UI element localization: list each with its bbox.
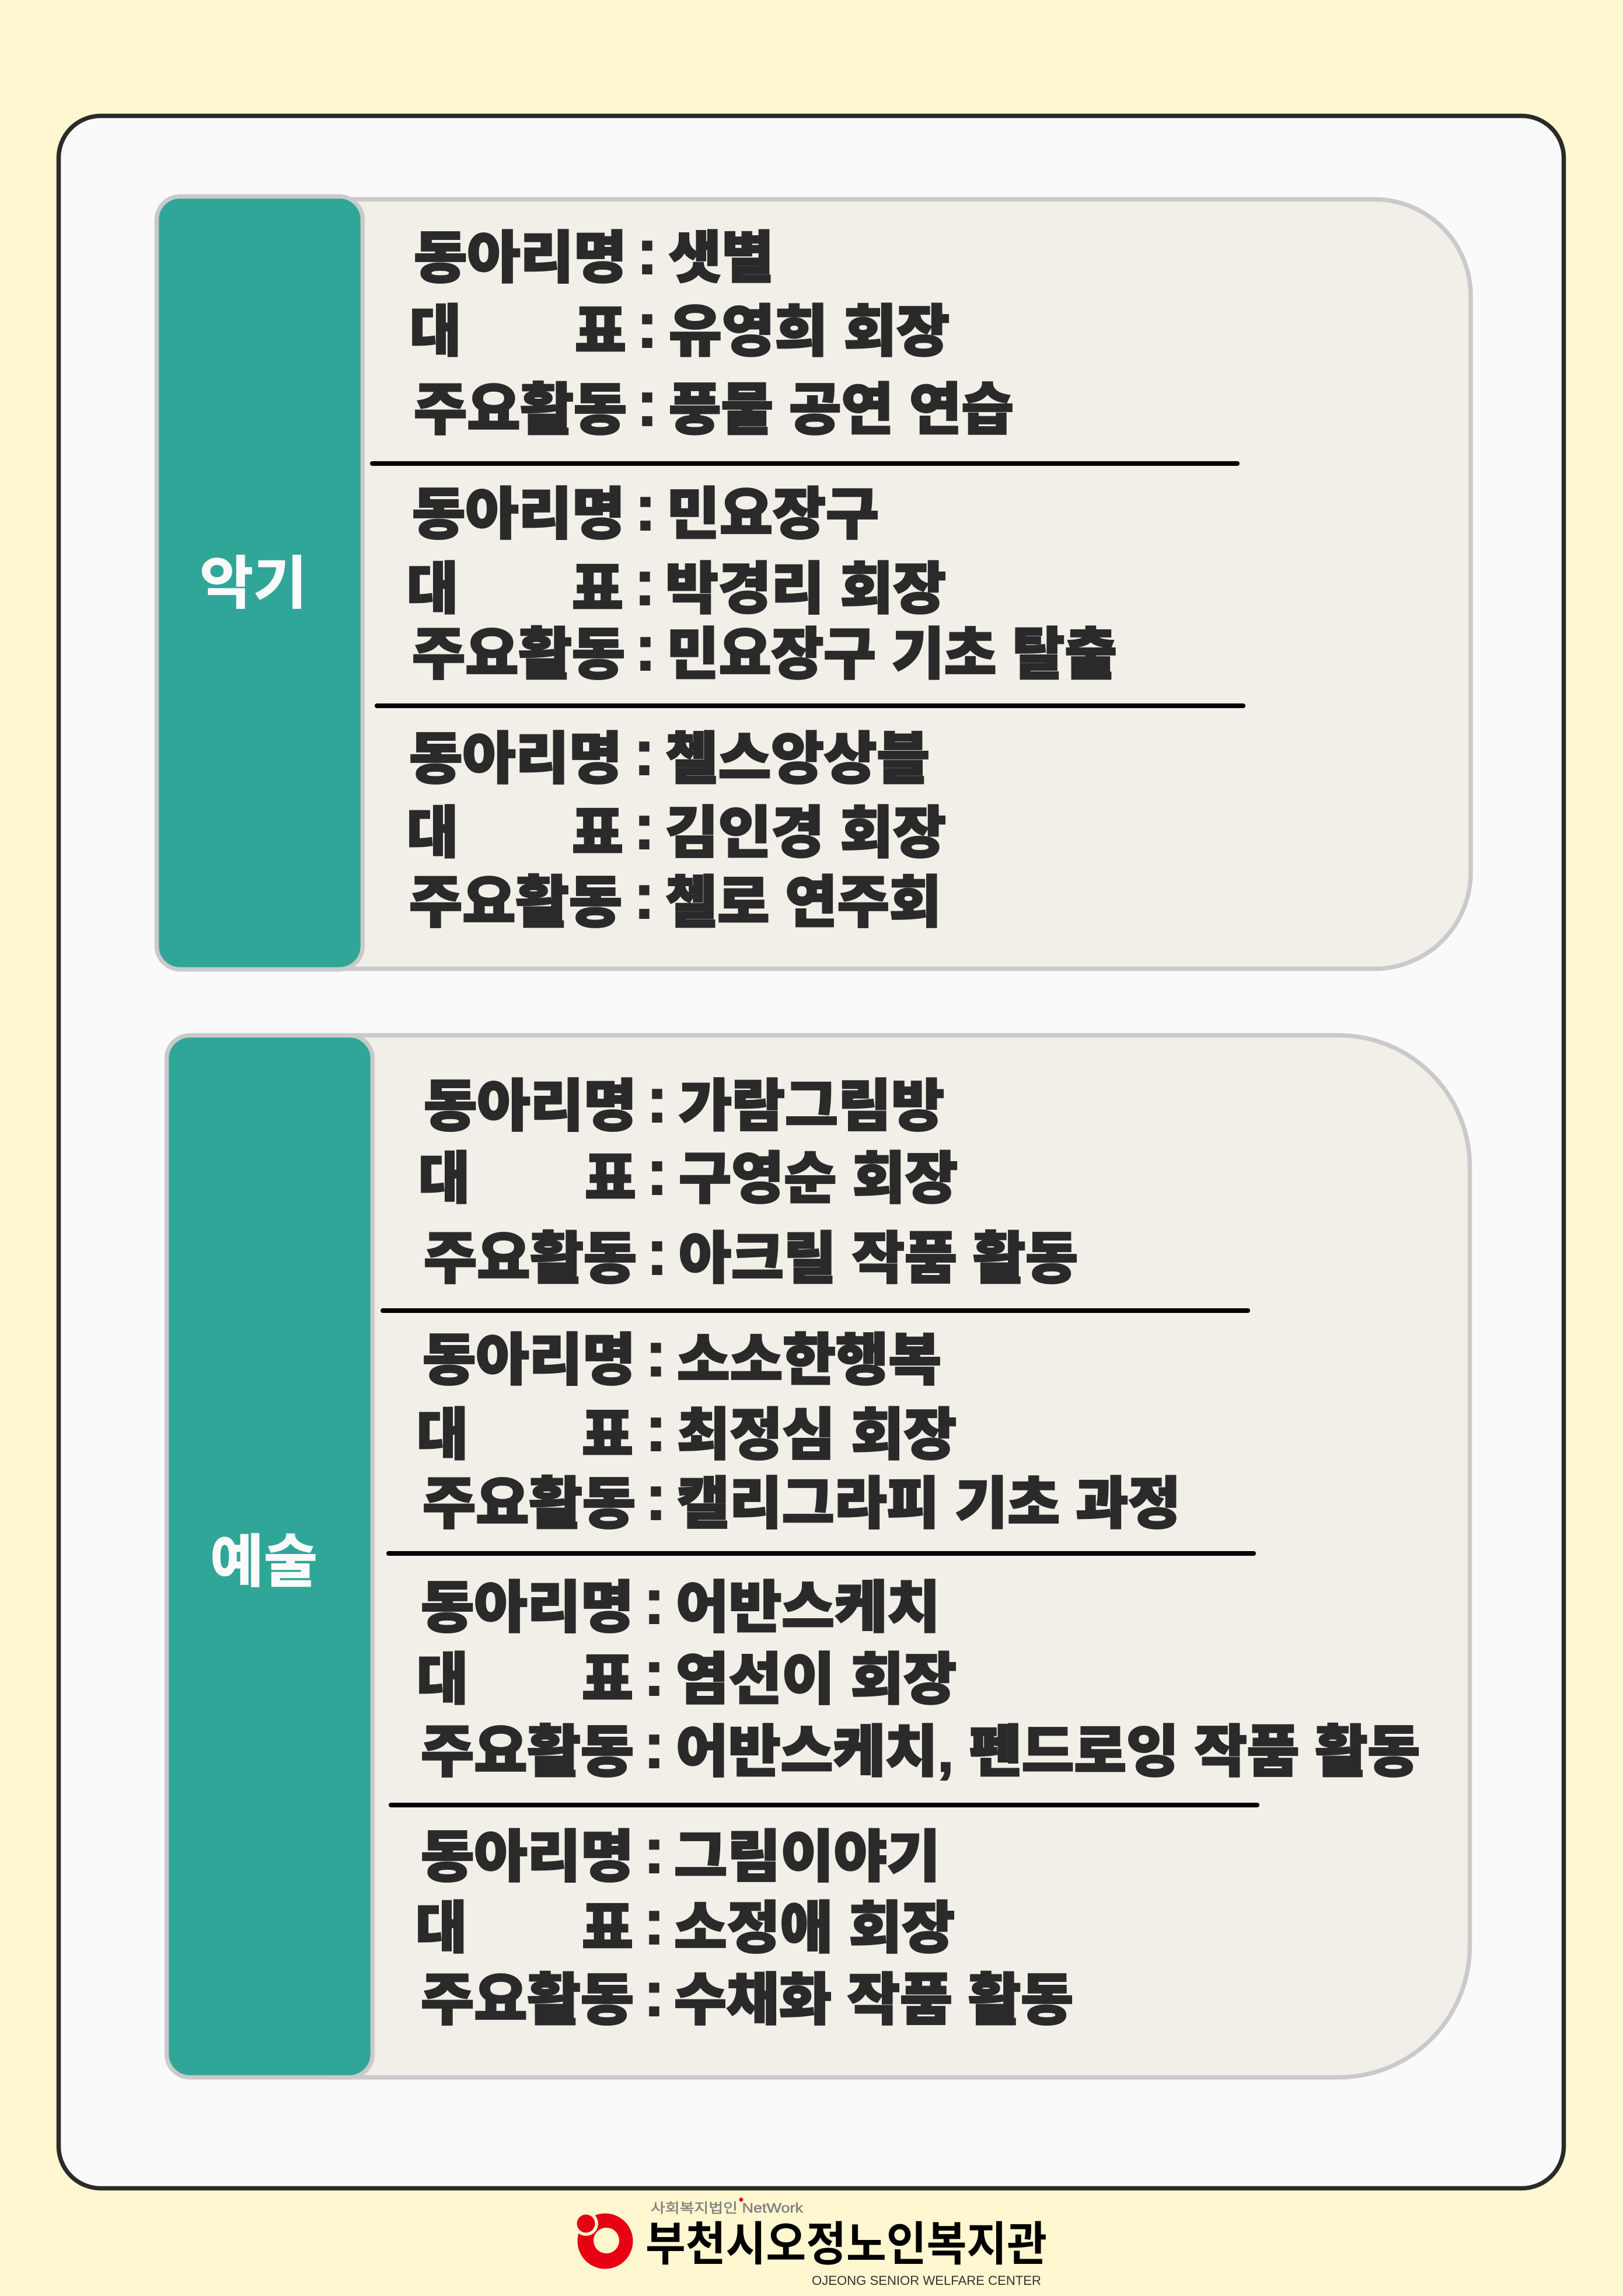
club block: 어반스케치: 표 — [582, 1649, 633, 1711]
club block: 첼스앙상블: : — [634, 860, 655, 932]
club block: 소소한행복: 동아리명 — [423, 1329, 636, 1392]
club block: 샛별: : — [637, 216, 658, 288]
club block: 샛별 — [410, 216, 1014, 441]
logo name: 부천시오정노인복지관 — [645, 2218, 1047, 2270]
club block: 소소한행복: 최정심 회장 — [677, 1404, 957, 1466]
club block: 첼스앙상블: 첼스앙상블 — [665, 728, 930, 790]
club block: 민요장구: : — [635, 472, 656, 544]
club block: 어반스케치: : — [644, 1710, 665, 1782]
panel: 악기 — [156, 196, 1471, 969]
club block: 첼스앙상블 — [407, 717, 946, 934]
club block: 샛별: 샛별 — [669, 227, 774, 290]
club block: 어반스케치: : — [644, 1566, 665, 1637]
club block: 첼스앙상블: 대 — [407, 802, 458, 865]
club block: 첼스앙상블: 첼로 연주회 — [665, 872, 941, 934]
club block: 가람그림방: 동아리명 — [424, 1075, 637, 1138]
club block: 그림이야기: 동아리명 — [421, 1826, 634, 1889]
category tab: 악기 — [156, 196, 363, 969]
club block: 소소한행복: 주요활동 — [423, 1473, 636, 1535]
club block: 그림이야기: : — [644, 1958, 665, 2030]
club block: 민요장구: 표 — [572, 558, 623, 621]
club block: 소소한행복: 캘리그라피 기초 과정 — [677, 1473, 1181, 1535]
club block: 샛별: 유영희 회장 — [669, 301, 950, 363]
club block: 민요장구: 민요장구 기초 탈출 — [666, 623, 1117, 686]
category tab: 예술: 예술 — [210, 1529, 317, 1594]
club block: 샛별: 동아리명 — [414, 227, 627, 290]
club block: 첼스앙상블: : — [634, 791, 655, 863]
club block: 그림이야기: 소정애 회장 — [674, 1897, 955, 1960]
club block: 소소한행복: : — [645, 1318, 666, 1390]
club block: 그림이야기 — [416, 1815, 1073, 2032]
club block: 그림이야기: : — [644, 1886, 665, 1958]
club block: 그림이야기: 그림이야기 — [674, 1826, 940, 1889]
club block: 그림이야기: 대 — [416, 1897, 467, 1960]
club block: 가람그림방: 대 — [418, 1148, 470, 1210]
club block: 가람그림방 — [418, 1064, 1078, 1290]
club block: 가람그림방: 가람그림방 — [679, 1075, 944, 1138]
club block: 가람그림방: 아크릴 작품 활동 — [679, 1228, 1078, 1290]
club block: 민요장구: 박경리 회장 — [665, 558, 946, 621]
club block: 어반스케치: 대 — [417, 1649, 468, 1711]
logo english name: OJEONG SENIOR WELFARE CENTER — [812, 2273, 1041, 2288]
category tab: 악기: 악기 — [200, 551, 307, 615]
club block: 어반스케치 — [417, 1566, 1420, 1783]
logo: 부천시오정노인복지관 — [574, 2197, 1047, 2288]
club block: 샛별: : — [637, 368, 658, 440]
club block: 어반스케치: : — [644, 1637, 665, 1709]
club block: 샛별: 표 — [575, 301, 626, 363]
club block: 첼스앙상블: 표 — [572, 802, 623, 865]
club block: 어반스케치: 주요활동 — [421, 1721, 634, 1783]
club block: 샛별: 주요활동 — [414, 379, 627, 441]
club block: 민요장구: 주요활동 — [412, 623, 625, 686]
logo overline text: 사회복지법인 NetWork — [651, 2200, 804, 2215]
club block: 가람그림방: : — [647, 1137, 668, 1208]
club block: 소소한행복: 표 — [582, 1404, 633, 1466]
club block: 첼스앙상블: 김인경 회장 — [665, 802, 946, 865]
club block: 어반스케치: 동아리명 — [421, 1577, 634, 1639]
club block: 샛별: : — [637, 290, 658, 361]
category tab: 예술 — [167, 1036, 372, 2077]
club block: 그림이야기: 주요활동 — [421, 1969, 634, 2032]
club block: 가람그림방: 구영순 회장 — [679, 1148, 958, 1210]
club block: 첼스앙상블: 주요활동 — [409, 872, 622, 934]
club block: 소소한행복: 대 — [417, 1404, 468, 1466]
club block: 가람그림방: : — [647, 1064, 668, 1136]
club block: 첼스앙상블: : — [634, 717, 655, 789]
club block: 가람그림방: 표 — [585, 1148, 636, 1210]
club block: 그림이야기: : — [644, 1815, 665, 1887]
club block: 민요장구 — [407, 472, 1117, 686]
club block: 민요장구: : — [634, 547, 655, 619]
club block: 어반스케치: 어반스케치 — [676, 1577, 940, 1639]
club block: 민요장구: 동아리명 — [412, 483, 625, 546]
club block: 가람그림방: : — [647, 1217, 668, 1288]
club block: 민요장구: 민요장구 — [666, 483, 879, 546]
club block: 어반스케치: 어반스케치, 펜드로잉 작품 활동 — [676, 1721, 1420, 1783]
club block: 샛별: 대 — [410, 301, 461, 363]
club block: 민요장구: 대 — [407, 558, 458, 621]
club block: 소소한행복: 소소한행복 — [677, 1329, 941, 1392]
club block: 가람그림방: 주요활동 — [424, 1228, 637, 1290]
club block: 소소한행복 — [417, 1318, 1181, 1535]
panel: 예술 — [167, 1036, 1470, 2077]
club block: 소소한행복: : — [645, 1393, 666, 1465]
club block: 민요장구: : — [635, 612, 656, 684]
icon: red ring emblem — [574, 2211, 633, 2269]
panel body: 악기 — [193, 200, 1471, 969]
club block: 그림이야기: 수채화 작품 활동 — [674, 1969, 1073, 2032]
club block: 소소한행복: : — [645, 1462, 666, 1534]
club block: 샛별: 풍물 공연 연습 — [669, 379, 1014, 441]
club block: 첼스앙상블: 동아리명 — [409, 728, 622, 790]
panel body: 예술 — [198, 1036, 1470, 2077]
club block: 그림이야기: 표 — [582, 1897, 633, 1960]
club block: 어반스케치: 염선이 회장 — [676, 1649, 957, 1711]
